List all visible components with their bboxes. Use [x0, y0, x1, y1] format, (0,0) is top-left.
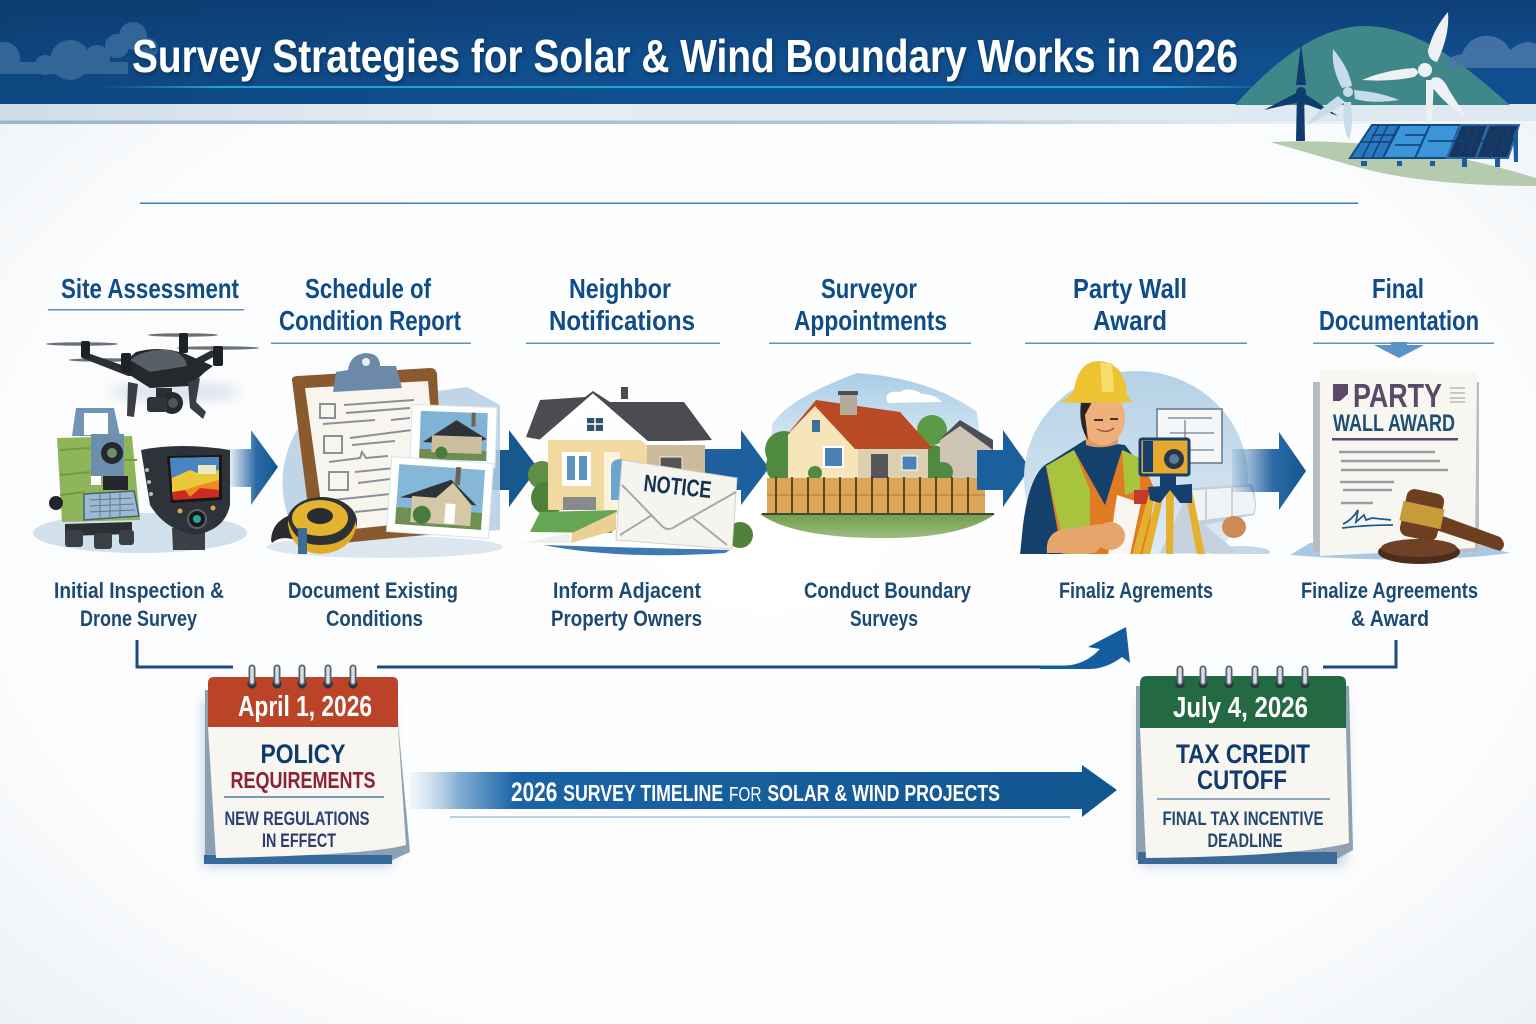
hat	[1060, 361, 1132, 403]
description: boundary surveys: Conduct Boundary	[804, 578, 972, 603]
description: document conditions: Document Existing	[288, 578, 458, 603]
panel: step 3 neighbor notifications	[522, 273, 753, 555]
document title: PARTY	[1353, 377, 1442, 414]
timeline arrow	[410, 765, 1117, 818]
panel: step 4 surveyor appointments	[760, 273, 995, 538]
panel: calendar april 1	[204, 668, 410, 865]
calendar text: REQUIREMENTS	[230, 767, 376, 793]
calendar rings	[252, 668, 353, 684]
calendar header	[208, 677, 398, 727]
torso	[1020, 440, 1132, 554]
arrow 5	[1232, 432, 1306, 510]
timeline label: 2026 SURVEY TIMELINE FOR SOLAR & WIND PROJECTS	[511, 777, 1000, 807]
calendar text: DEADLINE	[1208, 831, 1282, 852]
calendar header: April 1, 2026	[238, 691, 372, 723]
description: document conditions: Conditions	[326, 606, 423, 631]
panel: step 1 site assessment	[33, 273, 259, 553]
panel: step 5 party wall award	[1020, 278, 1270, 554]
calendar text: CUTOFF	[1197, 765, 1287, 795]
heading: surveyor appointments: Surveyor	[821, 273, 917, 304]
connector bracket lines	[137, 627, 1396, 669]
description: initial inspection: Initial Inspection &	[54, 578, 224, 603]
description: finalize agreements: & Award	[1351, 606, 1429, 631]
calendar text: POLICY	[260, 739, 346, 769]
calendar text: FINAL TAX INCENTIVE	[1162, 809, 1324, 830]
heading: final documentation: Final	[1372, 273, 1424, 304]
timeline rule	[140, 202, 1358, 204]
description: finaliz agrements: Finaliz Agrements	[1059, 578, 1213, 603]
calendar header	[1140, 676, 1346, 728]
description: inform owners: Inform Adjacent	[553, 578, 702, 603]
documents	[1108, 495, 1141, 555]
panel: calendar july 4	[1136, 669, 1353, 865]
icon: house with notice envelope	[522, 387, 753, 555]
heading: party wall award	[1025, 273, 1247, 344]
heading: party wall award: Award	[1093, 305, 1167, 336]
description: boundary surveys: Surveys	[850, 606, 918, 631]
heading: party wall award: Party Wall	[1073, 273, 1187, 304]
calendar header: July 4, 2026	[1173, 692, 1308, 724]
description: boundary surveys	[804, 578, 972, 631]
description: inform owners	[551, 578, 702, 631]
title: Survey Strategies for Solar & Wind Boundary Works in 2026	[132, 30, 1238, 82]
calendar text	[224, 739, 384, 852]
envelope	[616, 460, 737, 549]
decorative line under title	[100, 86, 1280, 88]
document title: WALL AWARD	[1333, 410, 1455, 437]
description: finalize agreements	[1301, 578, 1478, 631]
arrow 2	[480, 430, 538, 507]
notice label: NOTICE	[642, 470, 713, 504]
icon: clipboard with photos	[267, 353, 503, 558]
fence	[767, 478, 985, 513]
icon: wind and solar scene	[1235, 12, 1536, 186]
tripod and station	[1132, 490, 1205, 555]
photo 1	[410, 405, 497, 467]
icon: thermal camera	[141, 446, 230, 550]
panel: step 2 schedule of condition	[267, 273, 503, 558]
heading: final documentation: Documentation	[1319, 305, 1479, 336]
gavel	[1378, 540, 1460, 564]
pale turbine	[1306, 49, 1399, 140]
heading: neighbor notifications: Notifications	[549, 305, 695, 336]
icon: party wall award document and gavel	[1290, 370, 1510, 564]
heading: schedule of condition report	[271, 273, 471, 344]
arrow 4	[977, 430, 1030, 507]
document title	[1333, 377, 1455, 437]
step descriptions	[54, 578, 1478, 631]
calendar text: TAX CREDIT	[1176, 739, 1310, 769]
arrow 3	[700, 430, 769, 505]
tape measure	[271, 515, 296, 543]
icon: left clouds	[0, 22, 158, 80]
solar panels	[1350, 125, 1399, 158]
photo 2	[387, 457, 494, 538]
calendar text: NEW REGULATIONS	[224, 809, 370, 830]
description: initial inspection: Drone Survey	[80, 606, 198, 631]
heading: schedule of condition report: Schedule of	[305, 273, 432, 304]
heading: schedule of condition report: Condition Report	[279, 305, 461, 336]
arrow 1	[230, 430, 278, 505]
description: inform owners: Property Owners	[551, 606, 702, 631]
header banner	[0, 0, 1536, 186]
heading: surveyor appointments: Appointments	[794, 305, 947, 336]
description: document conditions	[288, 578, 458, 631]
calendar text: IN EFFECT	[262, 831, 336, 852]
heading: surveyor appointments	[769, 273, 971, 344]
icon: surveyor worker	[1020, 361, 1270, 554]
description: initial inspection	[54, 578, 224, 631]
heading: neighbor notifications: Neighbor	[569, 273, 671, 304]
calendar rings	[1180, 669, 1305, 684]
panel: step 6 final documentation	[1290, 273, 1510, 564]
icon: house with fence	[760, 373, 995, 538]
head	[1085, 435, 1118, 448]
description: finalize agreements: Finalize Agreements	[1301, 578, 1478, 603]
heading: neighbor notifications	[526, 273, 720, 344]
calendar text	[1157, 739, 1330, 852]
heading: final documentation	[1313, 273, 1494, 358]
icon: total station	[33, 408, 247, 553]
heading: site assessment: Site Assessment	[61, 273, 239, 304]
dark turbine	[1264, 43, 1338, 141]
white turbine	[1362, 12, 1467, 123]
icon: drone	[46, 333, 259, 419]
